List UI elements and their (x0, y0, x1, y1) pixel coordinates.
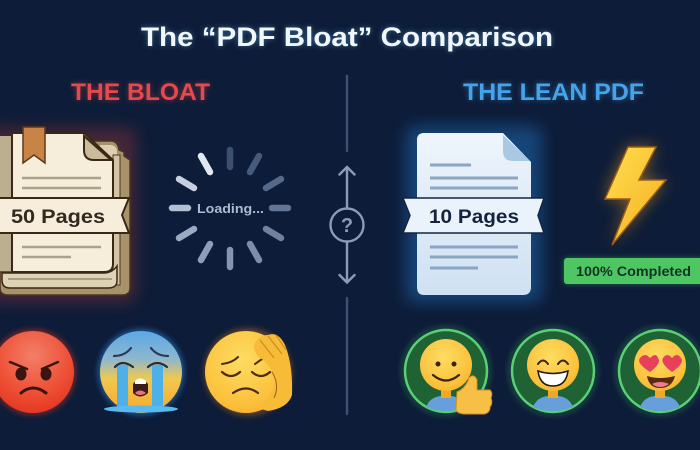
emoji: angry face (0, 329, 76, 415)
title: The “PDF Bloat” Comparison (141, 22, 553, 52)
heading: the lean pdf: THE LEAN PDF (463, 79, 644, 106)
icon: bloated document stack (0, 127, 136, 302)
hand (254, 334, 292, 411)
icon: lean document (403, 126, 544, 302)
avatar: thumbs up (403, 328, 492, 414)
avatar: heart eyes (617, 328, 700, 414)
heading: the lean pdf: THE LEAN PDF (463, 79, 644, 106)
icon: thumb (456, 376, 492, 414)
emoji: crying face (98, 329, 184, 415)
avatar: grinning (510, 328, 596, 414)
badge: 100% completed: 100% Completed (576, 264, 691, 279)
ribbon: 10 pages (403, 198, 544, 233)
loading spinner (172, 150, 288, 267)
fold corner (84, 136, 111, 160)
divider with question mark: ? (341, 215, 353, 237)
title: The “PDF Bloat” Comparison (141, 22, 553, 52)
divider with question mark (330, 76, 364, 414)
emoji: facepalm face (204, 328, 292, 416)
ribbon: 10 pages: 10 Pages (429, 206, 519, 228)
badge: 100% completed (564, 258, 700, 284)
label: loading: Loading... (197, 202, 264, 216)
bookmark (23, 127, 45, 163)
ribbon: 50 pages (0, 198, 129, 233)
ribbon: 50 pages: 50 Pages (11, 206, 105, 228)
heading: the bloat: THE BLOAT (71, 79, 210, 106)
heading: the bloat: THE BLOAT (71, 79, 210, 106)
text lines (22, 178, 101, 257)
icon: lightning bolt (605, 147, 666, 245)
